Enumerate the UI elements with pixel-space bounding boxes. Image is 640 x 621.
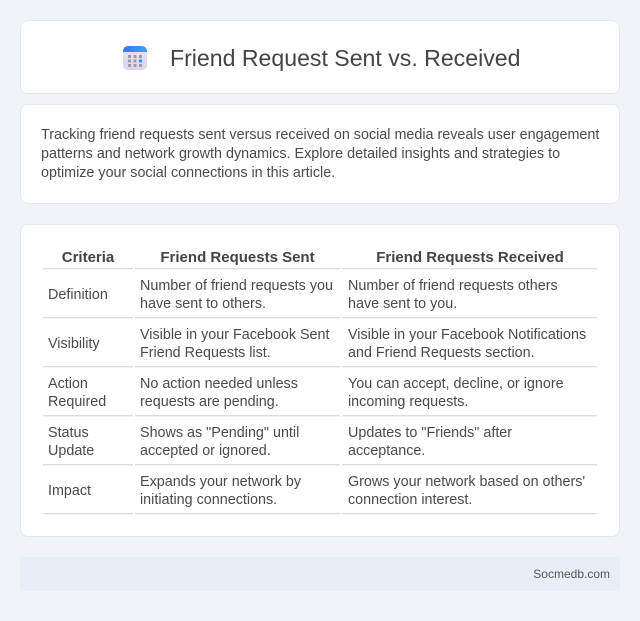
definition received: Number of friend requests others [348,278,558,294]
impact sent: initiating connections. [140,492,277,508]
definition sent [140,278,333,312]
impact received: Grows your network based on others' [348,474,585,490]
footer bar [20,557,620,591]
visibility received: Visible in your Facebook Notifications [348,327,586,343]
status received [348,425,512,459]
definition received [348,278,558,312]
visibility sent [140,327,330,361]
title card [20,20,620,94]
header: criteria: Criteria [62,249,114,266]
status sent [140,425,299,459]
action sent: requests are pending. [140,394,279,410]
comparison table panel [20,224,620,537]
footer text: Socmedb.com [533,567,610,581]
action sent [140,376,298,410]
row: impact: Impact [48,483,91,499]
row: visibility: Visibility [48,336,100,352]
row: status update [48,425,94,459]
impact received [348,474,585,508]
icon: calendar [123,46,147,70]
definition sent: have sent to others. [140,296,266,312]
intro text panel [20,104,620,204]
row: status update: Update [48,443,94,459]
visibility received [348,327,586,361]
row: action required [48,376,106,410]
visibility sent: Visible in your Facebook Sent [140,327,330,343]
row: action required: Action [48,376,88,392]
row: action required: Required [48,394,106,410]
impact sent: Expands your network by [140,474,301,490]
intro line 2: patterns and network growth dynamics. Explore detailed insights and strategies to [41,146,560,162]
status received: Updates to "Friends" after [348,425,512,441]
status sent: Shows as "Pending" until [140,425,299,441]
title: Friend Request Sent vs. Received [170,45,520,71]
header: sent: Friend Requests Sent [160,249,315,266]
intro line 3: optimize your social connections in this article. [41,165,335,181]
visibility sent: Friend Requests list. [140,345,271,361]
definition received: have sent to you. [348,296,457,312]
impact sent [140,474,301,508]
status sent: accepted or ignored. [140,443,271,459]
intro line 1: Tracking friend requests sent versus received on social media reveals user engagement [41,127,599,143]
visibility received: and Friend Requests section. [348,345,535,361]
action received [348,376,564,410]
action sent: No action needed unless [140,376,298,392]
impact received: connection interest. [348,492,472,508]
definition sent: Number of friend requests you [140,278,333,294]
action received: You can accept, decline, or ignore [348,376,564,392]
action received: incoming requests. [348,394,468,410]
header: received: Friend Requests Received [376,249,564,266]
row: definition: Definition [48,287,108,303]
status received: acceptance. [348,443,425,459]
row: status update: Status [48,425,89,441]
